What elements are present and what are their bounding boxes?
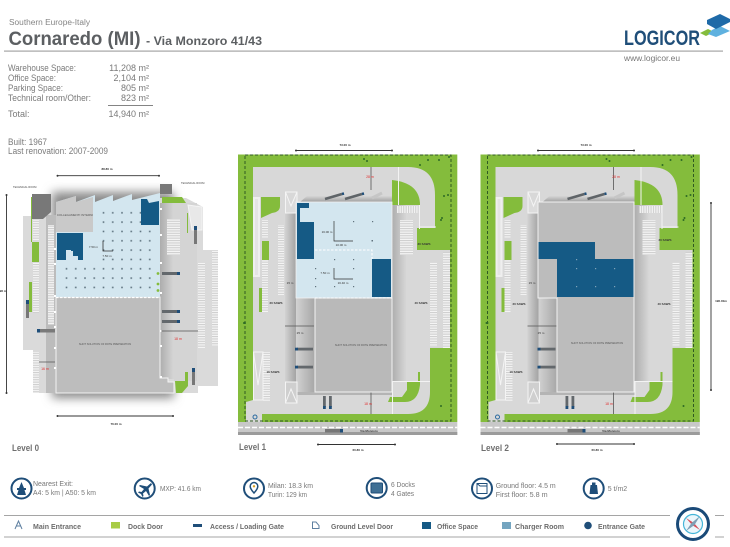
warehouse upper unit — [56, 193, 160, 297]
level 2 labels — [509, 175, 672, 433]
building dates — [8, 137, 108, 156]
city distances: Milan: 18.3 km — [268, 481, 313, 490]
office space blue — [57, 199, 159, 260]
dashed wall — [315, 250, 392, 298]
nearest exit text: A4: 5 km | A50: 5 km — [33, 488, 96, 497]
dock doors — [54, 208, 162, 378]
legend: office space — [422, 522, 478, 531]
level 2 labels: 18 m — [605, 402, 613, 406]
docks text: 6 Docks — [391, 480, 415, 489]
area statistics: 14,940 m² — [108, 109, 149, 119]
legend: dock door — [111, 522, 163, 531]
office space blue — [297, 203, 391, 297]
dimension arrows — [295, 150, 396, 446]
level 1 labels: 40 SAWS — [414, 301, 428, 305]
column grid — [62, 211, 158, 294]
dimension labels: 60.80 m — [591, 448, 603, 452]
icon: dock — [367, 478, 387, 498]
dimension labels: 88.80 m — [101, 167, 113, 171]
dimension labels — [580, 143, 727, 452]
icon: floor height — [472, 478, 492, 498]
airport distance: MXP: 41.6 km — [160, 484, 201, 493]
nearest exit text — [33, 479, 96, 497]
website: www.logicor.eu — [623, 54, 680, 63]
columns and inner dimensions — [315, 221, 373, 287]
city distances — [268, 481, 313, 499]
warehouse lower unit — [56, 297, 174, 393]
legend — [4, 515, 724, 538]
inner dimensions and labels: 7.50 m — [102, 254, 112, 258]
icon: floor load weight — [584, 478, 604, 498]
legend: main entrance — [15, 521, 81, 531]
floor plan: level 0 — [0, 167, 218, 453]
dimension arrows — [6, 175, 174, 417]
level 1 labels — [266, 175, 431, 433]
floor height text: First floor: 5.8 m — [496, 490, 548, 499]
level 1 labels: 10.00 m — [336, 243, 347, 247]
level 2 labels: 28 m — [612, 175, 620, 179]
header — [4, 18, 723, 52]
area statistics — [8, 63, 153, 119]
level 2 labels: 20 SAWS — [512, 302, 526, 306]
level 0 label: Level 0 — [12, 443, 39, 453]
logo mark — [700, 14, 730, 37]
area statistics: 823 m² — [121, 93, 149, 103]
level 1 labels: 7.50 m — [320, 271, 330, 275]
level 1 labels: 16.00 m — [322, 230, 333, 234]
level 1 labels: 18 m — [364, 402, 372, 406]
office space blue — [538, 242, 634, 297]
legend: ground level door: Ground Level Door — [331, 524, 393, 531]
inner dimensions and labels: 7.50 m — [89, 245, 99, 249]
region label: Southern Europe-Italy — [9, 18, 90, 27]
floor load text: 5 t/m2 — [608, 484, 627, 493]
surrounding yard — [23, 196, 218, 393]
legend: main entrance: Main Entrance — [33, 524, 81, 531]
compass — [676, 507, 710, 541]
site base — [480, 154, 700, 435]
building dates: Built: 1967 — [8, 137, 47, 147]
logo — [623, 14, 730, 63]
floor height text — [496, 481, 556, 499]
level 1 labels: 16.40 m — [338, 281, 349, 285]
area statistics: Total: — [8, 109, 30, 119]
level 2 labels: 15 m — [529, 281, 536, 285]
level 2 labels: 30 SAWS — [658, 238, 672, 242]
dimension arrows — [537, 150, 712, 445]
dimension labels: 60.80 m — [352, 448, 364, 452]
green areas — [29, 197, 188, 393]
dividing dashed wall — [56, 296, 160, 298]
docks text — [391, 480, 415, 498]
floor height text: Ground floor: 4.5 m — [496, 481, 556, 490]
level 2 labels: 40 SAWS — [657, 302, 671, 306]
docks text: 4 Gates — [391, 489, 414, 498]
level 1 labels: 20 SAWS — [269, 301, 283, 305]
icon: motorway exit — [12, 478, 32, 498]
level 1 labels: 25 m — [297, 331, 304, 335]
area statistics: Office Space: — [8, 73, 56, 83]
area statistics: 805 m² — [121, 83, 149, 93]
level 1 labels: 15 m — [287, 281, 294, 285]
area statistics: 2,104 m² — [113, 73, 149, 83]
trucks — [26, 226, 197, 385]
legend: entrance gate: Entrance Gate — [598, 524, 645, 531]
city distances: Turin: 129 km — [268, 490, 307, 499]
floor plan: level 1 — [238, 143, 457, 452]
level 1 labels: 28 m — [366, 175, 374, 179]
legend: dock door: Dock Door — [128, 524, 163, 531]
area statistics: Parking Space: — [8, 83, 63, 93]
building dates: Last renovation: 2007-2009 — [8, 146, 108, 156]
icon: map pin — [244, 478, 264, 498]
floor plan: level 2 — [480, 143, 727, 453]
warehouse lower unit — [315, 298, 392, 392]
legend: charger room: Charger Room — [515, 524, 564, 531]
title: Cornaredo (MI) — [8, 29, 140, 50]
level 1 labels: SHOT SOLUTION OF ROTE PREPARATION — [335, 343, 387, 347]
address: - Via Monzoro 41/43 — [146, 34, 262, 48]
level 2 labels: 16 SAWS — [509, 370, 523, 374]
dimension labels: 196.00m — [715, 299, 727, 303]
area statistics: Technical room/Other: — [8, 93, 91, 103]
nearest exit text: Nearest Exit: — [33, 479, 73, 488]
columns — [576, 259, 615, 287]
level 1 label: Level 1 — [239, 442, 266, 452]
dimension labels: 76.00 m — [110, 422, 122, 426]
level 1 labels: 30 SAWS — [417, 242, 431, 246]
inner dimensions and labels: SHOT SOLUTION OF ROTE PREPARATION — [79, 342, 131, 346]
legend: access gate: Access / Loading Gate — [210, 524, 284, 531]
parking bays — [33, 205, 218, 393]
location and spec row — [12, 478, 627, 499]
inner dimensions and labels: 18 m — [174, 337, 182, 341]
dimension labels: 73.00 m — [339, 143, 351, 147]
legend: charger room — [502, 522, 564, 531]
level 1 labels: Via Monzoro — [360, 429, 378, 433]
logo wordmark: LOGICOR — [624, 27, 700, 50]
dimension labels — [0, 167, 122, 426]
level 2 labels: 25 m — [538, 331, 545, 335]
building shadow — [52, 192, 174, 398]
green doors — [157, 272, 159, 292]
header rule — [4, 50, 723, 52]
area statistics: Warehouse Space: — [8, 63, 76, 73]
level 1 labels: 16 SAWS — [266, 370, 280, 374]
inner dimensions and labels — [13, 181, 204, 371]
dimension labels: 73.00 m — [580, 143, 592, 147]
warehouse upper unit — [296, 202, 392, 298]
legend: entrance gate — [584, 522, 645, 531]
inner dimensions and labels: TECHNICAL ROOM — [181, 181, 204, 185]
building roof — [538, 202, 634, 392]
inner dimensions and labels: COLLEGAMENTI INTERNI — [57, 213, 93, 217]
inner dimensions and labels: TECHNICAL ROOM — [13, 185, 36, 189]
dimension labels — [339, 143, 364, 452]
level 2 labels: Via Monzoro — [602, 429, 620, 433]
area statistics: 11,208 m² — [109, 63, 149, 73]
level 2 labels: SHOT SOLUTION OF ROTE PREPARATION — [571, 341, 623, 345]
legend: office space: Office Space — [437, 524, 478, 531]
level 2 label: Level 2 — [481, 443, 509, 453]
office grey block — [56, 196, 93, 232]
legend: ground level door — [312, 522, 393, 531]
site base — [238, 154, 457, 435]
icon: airplane — [135, 478, 155, 498]
technical rooms — [32, 184, 172, 219]
inner dimensions and labels: 16 m — [41, 367, 49, 371]
